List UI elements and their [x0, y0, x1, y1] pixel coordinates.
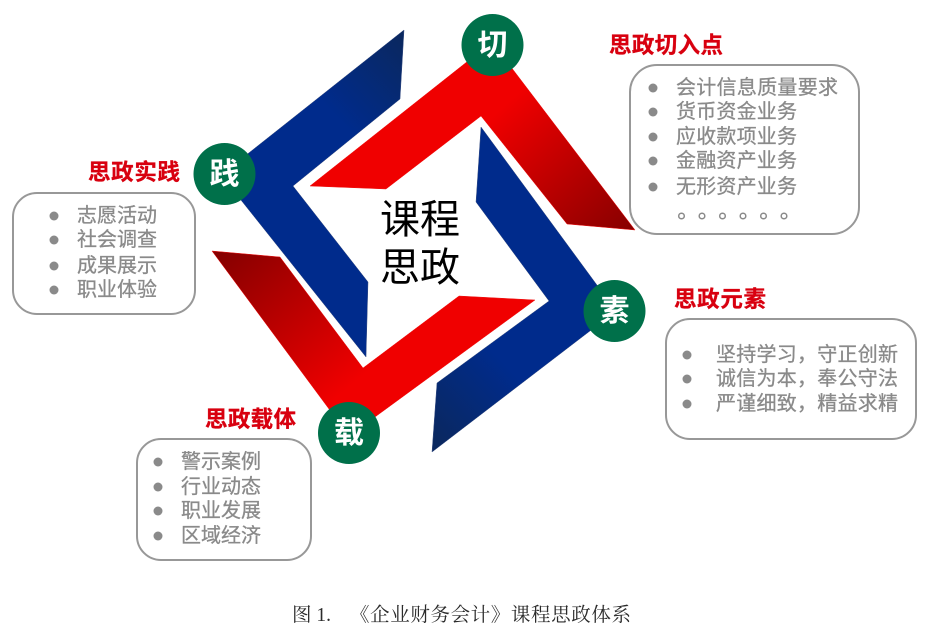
node: 切: 切: [478, 29, 508, 62]
heading: 思政切入点: 思政切入点: [609, 33, 723, 58]
heading: 思政载体: 思政载体: [205, 407, 296, 432]
panel: 思政切入点 list: 无形资产业务: [676, 175, 797, 198]
node: 载: [318, 402, 380, 464]
node: 素: 素: [600, 295, 630, 328]
node: 素: [584, 280, 646, 342]
panel: 思政切入点 list: 货币资金业务: [676, 100, 797, 123]
panel: 思政实践 list: 职业体验: [77, 278, 157, 301]
arrow: blue lower-right chevron: [432, 127, 616, 452]
node: 切: [462, 14, 524, 76]
node: 践: [194, 143, 256, 205]
panel: 思政实践 list: 成果展示: [77, 254, 157, 277]
center title: 思政: [380, 246, 460, 290]
panel: 思政元素 list: 坚持学习，守正创新: [716, 343, 898, 366]
center title: 课程: [380, 198, 460, 242]
heading: 思政元素: 思政元素: [674, 287, 766, 312]
caption: 《企业财务会计》课程思政体系: [350, 604, 631, 626]
panel: 思政实践 list: 志愿活动: [77, 204, 157, 227]
panel: 思政载体 list: 职业发展: [181, 499, 261, 522]
panel: 思政实践 list: [13, 193, 195, 314]
panel: 思政切入点 list: [630, 65, 859, 234]
panel: 思政切入点 list: 会计信息质量要求: [676, 76, 838, 99]
panel: 思政载体 list: 区域经济: [181, 524, 261, 547]
center title: [380, 198, 460, 290]
arrow: red lower-left chevron: [212, 251, 535, 436]
panel: 思政载体 list: [137, 439, 311, 560]
panel: 思政切入点 list: 金融资产业务: [676, 149, 797, 172]
panel: 思政元素 list: 严谨细致，精益求精: [716, 392, 898, 415]
panel: 思政载体 list: 警示案例: [181, 450, 261, 473]
heading: 思政实践: 思政实践: [88, 159, 180, 185]
node: 践: 践: [210, 158, 240, 191]
arrow: red upper-right chevron: [310, 42, 635, 230]
panel: 思政元素 list: [666, 319, 916, 439]
panel: 思政切入点 list: 应收款项业务: [676, 125, 797, 148]
panel: 思政元素 list: 诚信为本，奉公守法: [716, 367, 898, 390]
panel: 思政实践 list: 社会调查: [77, 228, 157, 251]
caption: 图 1.: [292, 604, 331, 626]
node: 载: 载: [334, 417, 364, 450]
arrow: blue upper-left chevron: [221, 30, 404, 357]
panel: 思政载体 list: 行业动态: [181, 475, 261, 498]
